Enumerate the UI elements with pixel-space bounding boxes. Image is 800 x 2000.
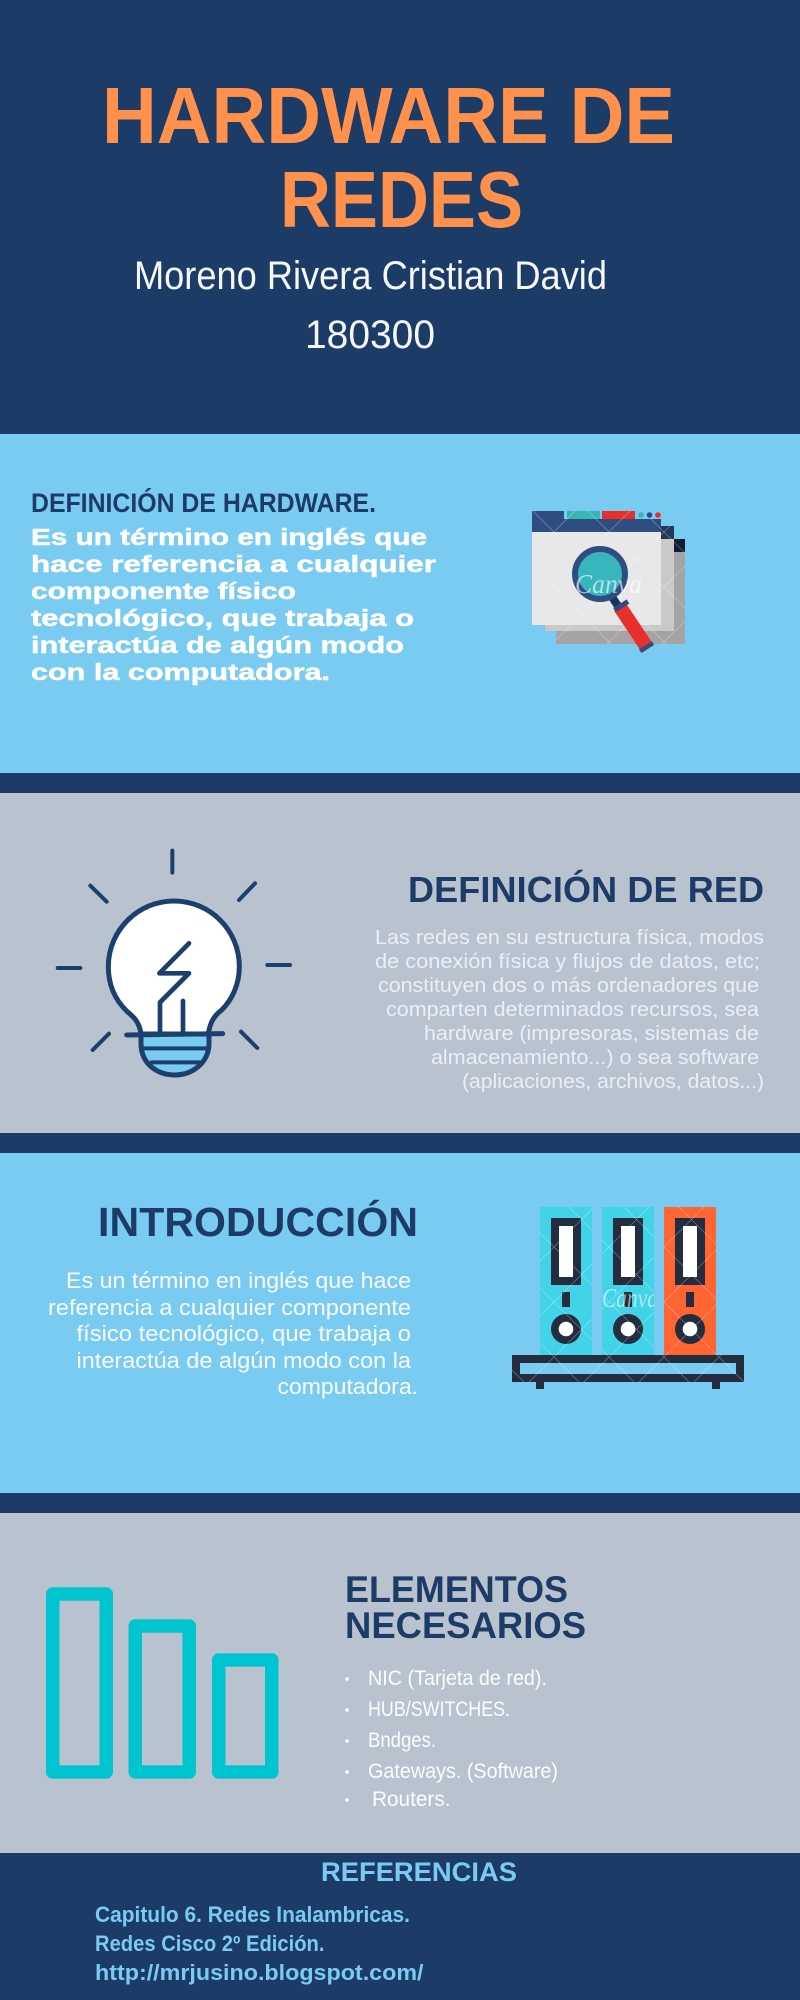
panel: network definition background (0, 793, 800, 1133)
title: HARDWARE DE (102, 71, 675, 160)
heading: hardware definition: DEFINICIÓN DE HARDWARE. (31, 487, 376, 518)
text block: introduction: referencia a cualquier componente (48, 1295, 411, 1320)
bulb glass (108, 901, 239, 1034)
list: required elements: HUB/SWITCHES. (368, 1698, 510, 1721)
list: required elements: Routers. (372, 1788, 450, 1811)
text block: introduction: Es un término en inglés que hace (66, 1268, 411, 1293)
text block: hardware definition: Es un término en inglés que (31, 524, 427, 550)
text block: references: Capitulo 6. Redes Inalambricas. (95, 1902, 410, 1927)
text block: network definition: de conexión física y flujos de datos, etc; (375, 951, 760, 973)
heading: required elements: ELEMENTOS (345, 1569, 568, 1610)
title (102, 71, 675, 244)
text block: hardware definition: tecnológico, que trabaja o (31, 605, 414, 631)
text block: network definition: comparten determinados recursos, sea (386, 999, 760, 1021)
heading: network definition: DEFINICIÓN DE RED (408, 868, 764, 910)
chart icon: three descending bars (53, 1594, 272, 1772)
text block: network definition: almacenamiento...) o sea software (431, 1047, 759, 1069)
base stripes and filament (143, 1048, 207, 1062)
text block: introduction: interactúa de algún modo con la (76, 1348, 412, 1373)
heading: references: REFERENCIAS (321, 1857, 517, 1887)
heading: required elements (345, 1569, 586, 1646)
icon: light bulb (58, 851, 290, 1075)
text block: references: Redes Cisco 2º Edición. (95, 1931, 324, 1956)
text block: network definition: (aplicaciones, archivos, datos...) (462, 1071, 764, 1093)
text block: network definition (375, 927, 764, 1093)
text block: hardware definition: hace referencia a cualquier (31, 551, 436, 577)
text block: references: http://mrjusino.blogspot.com/ (95, 1960, 424, 1985)
text block: hardware definition: componente físico (31, 578, 296, 604)
list: required elements (345, 1667, 558, 1811)
heading: introduction: INTRODUCCIÓN (98, 1199, 418, 1245)
text block: introduction (48, 1268, 418, 1399)
text block: introduction: físico tecnológico, que trabaja o (76, 1321, 411, 1346)
text block: hardware definition: interactúa de algún modo (31, 632, 404, 658)
text block: hardware definition: con la computadora. (31, 659, 330, 685)
text block: introduction: computadora. (278, 1374, 418, 1399)
bulb base (141, 1034, 209, 1075)
text block: network definition: Las redes en su estructura física, modos (375, 927, 764, 949)
list: required elements: Bndges. (368, 1729, 436, 1752)
panel: header background (0, 0, 800, 434)
text block: network definition: hardware (impresoras, sistemas de (424, 1023, 759, 1045)
icon: browser windows with magnifying glass (532, 511, 685, 651)
panel: introduction background (0, 1153, 800, 1493)
author name: Moreno Rivera Cristian David (134, 254, 607, 298)
icon: binders on a shelf (512, 1207, 744, 1389)
panel: hardware definition background (0, 434, 800, 773)
student id: 180300 (305, 313, 435, 357)
list: required elements: NIC (Tarjeta de red). (368, 1667, 547, 1690)
text block: references (95, 1902, 424, 1985)
text block: hardware definition (31, 524, 436, 685)
rays (58, 851, 290, 1050)
icon: binders on a shelf: Canva (602, 1283, 658, 1313)
heading: required elements: NECESARIOS (345, 1605, 586, 1646)
list: required elements: Gateways. (Software) (368, 1760, 558, 1783)
text block: network definition: constituyen dos o más ordenadores que (378, 975, 759, 997)
title: REDES (280, 155, 523, 244)
icon: browser windows with magnifying glass: Canva (575, 569, 642, 599)
panel: required elements background (0, 1513, 800, 1853)
